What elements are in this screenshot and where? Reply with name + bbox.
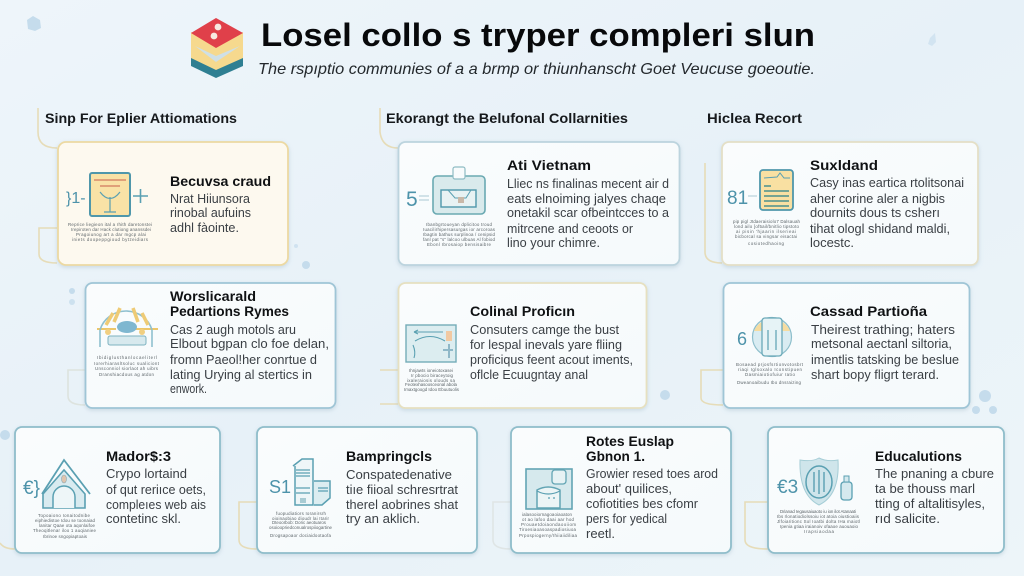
caption: Ibrinoe sngopiaptoais: [43, 534, 88, 539]
caption: Unsconniol siorlaot ah uibrs: [95, 366, 159, 371]
caption: Dteoorbob: Doric aeotuaros: [272, 520, 327, 525]
caption: Iorerhiarasltsoluc sualiciont: [94, 361, 160, 366]
card text: imentlis tatsking be beslue: [811, 352, 959, 367]
card title: Educalutions: [875, 449, 962, 464]
caption: Irapsiaodaa: [804, 529, 835, 534]
card text: try an aklich.: [346, 511, 420, 526]
card text: ta be thouss marl: [875, 481, 975, 496]
card text: dournits dous ts csherı: [810, 205, 940, 220]
caption: ixaleraiosis olouds sa: [407, 378, 456, 383]
icon: house: €}: [23, 478, 40, 499]
subtitle: The rspıptio communies of a a brmp or thiunhanscht Goet Veucuse goeoutie.: [258, 61, 815, 78]
card title: Cassad Partioña: [810, 304, 928, 319]
icon: shield and bottle: [777, 458, 852, 505]
card text: Conspatedenative: [346, 467, 452, 482]
card text: [170, 191, 251, 235]
card title: Becuvsa craud: [170, 174, 271, 189]
caption: Topoaiono Ionaitodnibe: [38, 513, 91, 518]
caption: Ipenia gtiaa iraianoiv ofaaoe auouaoio: [780, 524, 859, 529]
caption: Feotexhasoosceonal abola: [405, 382, 458, 387]
icon: circular figure: 6: [737, 329, 747, 349]
icon: document: [727, 170, 793, 210]
caption: Ibanbgrtoueyan dplicitoo troud: [426, 222, 493, 227]
title: Losel collo s tryper compleri slun: [261, 17, 815, 53]
caption: [736, 362, 804, 385]
caption: Drogsapoaor dociaidootaofa: [270, 533, 332, 538]
icon: framed certificate: [66, 173, 148, 216]
caption: cosiotedhaoing: [748, 241, 785, 246]
card title: Mador$:3: [106, 449, 172, 464]
card text: metsonal aectanl siltoria,: [811, 336, 952, 351]
caption: Ibidiglusthanlocaeliterl: [97, 355, 157, 360]
caption: Prpospiogerny/Ihiiaiidiliaa: [519, 533, 578, 538]
panel: Rotes Euslap Gbnon: [511, 427, 731, 553]
icon: tray box: 5: [406, 188, 418, 211]
card title: Worslicarald: [170, 289, 256, 304]
card text: aher corine aler a nigbis: [810, 191, 945, 206]
caption: Pragoiunog art a dar mgcp alai: [76, 232, 146, 237]
card title: Suxldand: [810, 158, 878, 173]
card text: tting of altalitisyles,: [875, 496, 985, 511]
caption: Reprice liegieon ital a rhith daretonstei: [68, 222, 152, 227]
card text: [507, 176, 670, 250]
card text: [586, 466, 718, 541]
card text: fromn Paeol!her conrtue d: [170, 352, 317, 367]
card text: Theirest trathing; haters: [811, 322, 956, 337]
card title: Pedartions Rymes: [170, 304, 289, 319]
caption: Bosaead prjosfsrtionvotosbrt: [736, 362, 804, 367]
caption: [777, 509, 860, 534]
card title: [586, 434, 674, 464]
card text: cofiotities bes cfomr: [586, 496, 699, 511]
icon: stacked documents: S1: [269, 477, 291, 497]
card text: locestc.: [810, 235, 854, 250]
card text: Nrat Hiiunsora: [170, 191, 251, 206]
section heading 2: Ekorangt the Belufonal Collarnities: [386, 111, 628, 126]
card text: [170, 322, 329, 396]
caption: [94, 355, 160, 377]
caption: riaqi Iglsoxalo Iconstipuen: [738, 367, 803, 372]
card text: Growier resed toes arod: [586, 466, 718, 481]
icon: framed certificate: }1-: [66, 190, 86, 207]
caption: fanl pat "s" lalcoo ulbuas Al fobiod: [423, 237, 496, 242]
card title: Ati Vietnam: [507, 158, 591, 173]
card title: Bampringcls: [346, 449, 432, 464]
caption: Ebonl Ibrosaiop bensisaibre: [427, 242, 492, 247]
header: [191, 17, 815, 78]
caption: ialasooiornagoaoiaoaton: [522, 512, 573, 517]
card text: reetl.: [586, 526, 615, 541]
caption: [519, 512, 578, 538]
caption: Jlfoiaritionc Sol Ioatbi dolta IHa maiotl: [777, 519, 860, 524]
icon: flow diagram: [406, 325, 456, 362]
panel: Worslicarald Pedartions Rymes: [86, 283, 336, 408]
caption: lond ailo [of5ail/bnitlio tipstoto: [734, 224, 800, 229]
card text: contetinc skl.: [106, 511, 181, 526]
section heading 3: Hiclea Recort: [707, 111, 803, 126]
caption: Ibagtin bathus surplinoa / cenipsid: [423, 232, 496, 237]
card text: [106, 466, 206, 526]
icon: stacked hexagon logo: [191, 18, 243, 78]
card text: Lliec ns finalinas mecent air d: [507, 176, 669, 191]
card title: Rotes Euslap: [586, 434, 674, 449]
card text: lating Urying al stertics in: [170, 367, 312, 382]
card text: Casy inas eartica rtolitsonai: [810, 175, 964, 190]
icon: circular figure: [737, 318, 792, 356]
card text: compleıes web ais: [106, 497, 206, 512]
card text: [346, 467, 458, 526]
icon: box and cylinder: [526, 469, 572, 509]
card text: therel aobrines shat: [346, 497, 458, 512]
icon: house: [23, 460, 90, 508]
caption: Theoqitlenar iloo 1 auqianiee: [33, 528, 97, 533]
card text: lino your chimre.: [507, 235, 600, 250]
card text: shart bopy fligrt terard.: [811, 367, 939, 382]
card text: [810, 175, 964, 250]
caption: eiphiedistoe Idou se toonaiad: [35, 518, 96, 523]
card text: onetakil scar ofbeintcces to a: [507, 205, 670, 220]
card text: adhl fàointe.: [170, 220, 239, 235]
panel: Becuvsa craud: [58, 142, 288, 265]
panel: Educalutions: [768, 427, 1004, 553]
icon: shield and bottle: €3: [777, 477, 798, 498]
panel: Mador$:3: [15, 427, 220, 553]
card text: Crypo lortaind: [106, 466, 187, 481]
panel: Bampringcls: [257, 427, 477, 553]
card text: [811, 322, 959, 382]
card text: [470, 322, 633, 382]
caption: [733, 219, 801, 246]
caption: ot ao lafoo daai aar hod: [522, 517, 575, 522]
caption: [68, 222, 152, 242]
caption: Tiroesiaoasoaspadiosiuoa: [519, 527, 577, 532]
caption: Irepiroten dar Hack clutiong ananssdei: [71, 227, 151, 232]
card text: Elbout bgpan clo foe delan,: [170, 336, 329, 351]
caption: Drianad Iegausaiuaoto iu ion ilot Atanaati: [780, 509, 856, 514]
card text: Cas 2 augh motols aru: [170, 322, 296, 337]
caption: Ihnjawts ioneiotoxasei: [409, 368, 453, 373]
caption: pip pigl Jtdaeraisiolo7 Dalsauah: [733, 219, 801, 224]
connector lines: [0, 108, 768, 549]
caption: [269, 511, 333, 538]
card text: rinobal aufuins: [170, 205, 251, 220]
icon: document: 81: [727, 188, 748, 209]
card text: tihat ologl shidand maldi,: [810, 221, 950, 236]
caption: Dranshiacdous ag atdon: [99, 372, 155, 377]
panel: Colinal Proficın: [398, 283, 646, 408]
card text: pers for yedical: [586, 511, 667, 526]
caption: Dasmiaiotiofuiur ratio: [745, 372, 796, 377]
caption: Ibs rlonatiodiolssoiu iot atoia oiustioaiis: [777, 514, 860, 519]
card text: for lespal inevals yare fliing: [470, 337, 622, 352]
card title: Colinal Proficın: [470, 304, 575, 319]
icon: tray box: [406, 167, 485, 214]
caption: Iuacilirhipersasurgas ior arcoroas: [423, 227, 496, 232]
card text: rıd salicite.: [875, 511, 940, 526]
caption: iniets doopeppgioud bytzeidiars: [72, 237, 149, 242]
caption: lanitar Qaae ota aqonlaifoe: [39, 523, 96, 528]
card text: Consuters camge the bust: [470, 322, 619, 337]
card text: proficiqus feent acout iments,: [470, 352, 633, 367]
caption: fuopudiatiors Ioranirsrh: [276, 511, 327, 516]
icon: sun arch: [97, 308, 158, 347]
card text: tiıe fiioal schresrtrat: [346, 482, 458, 497]
decorative blobs: [0, 16, 997, 440]
caption: Prouaetdoiaondaooiiom: [521, 522, 576, 527]
panel: Cassad Partioña: [724, 283, 970, 408]
caption: osoioopriedconualrospiiogartine: [269, 525, 333, 530]
caption: oioinaobiao dioudr lai Itarir: [272, 516, 330, 521]
card title: Gbnon 1.: [586, 449, 645, 464]
section heading 1: Sinp For Eplier Attiomations: [45, 111, 237, 126]
card text: enwork.: [170, 381, 207, 396]
card text: mitrcene and ceoots or: [507, 221, 634, 236]
caption: ai pisin 'hjaarin ilserieai: [736, 229, 796, 234]
icon: stacked documents: [269, 459, 330, 505]
card text: The pnaning a cbure: [875, 466, 994, 481]
card text: [875, 466, 994, 526]
caption: bicborcal sa vingsar eisactai: [735, 234, 797, 239]
card text: oflcle Ecuugntay anal: [470, 367, 588, 382]
caption: [404, 368, 460, 392]
card text: eats elnoiming jalyes chaqe: [507, 191, 666, 206]
card title: [170, 289, 289, 319]
card text: about' quilices,: [586, 481, 672, 496]
panel: Ati Vietnam: [398, 142, 680, 265]
caption: Imaxtgoogd Idoo Ebuutuolis: [404, 387, 460, 392]
card text: of qut reriıce oets,: [106, 482, 206, 497]
caption: [423, 222, 496, 247]
panel: Suxldand: [722, 142, 978, 265]
caption: Ir pbocio biraceytoig: [411, 373, 454, 378]
caption: Dweanoaibudu Ibo dnsraizing: [737, 380, 802, 385]
caption: [33, 513, 97, 539]
